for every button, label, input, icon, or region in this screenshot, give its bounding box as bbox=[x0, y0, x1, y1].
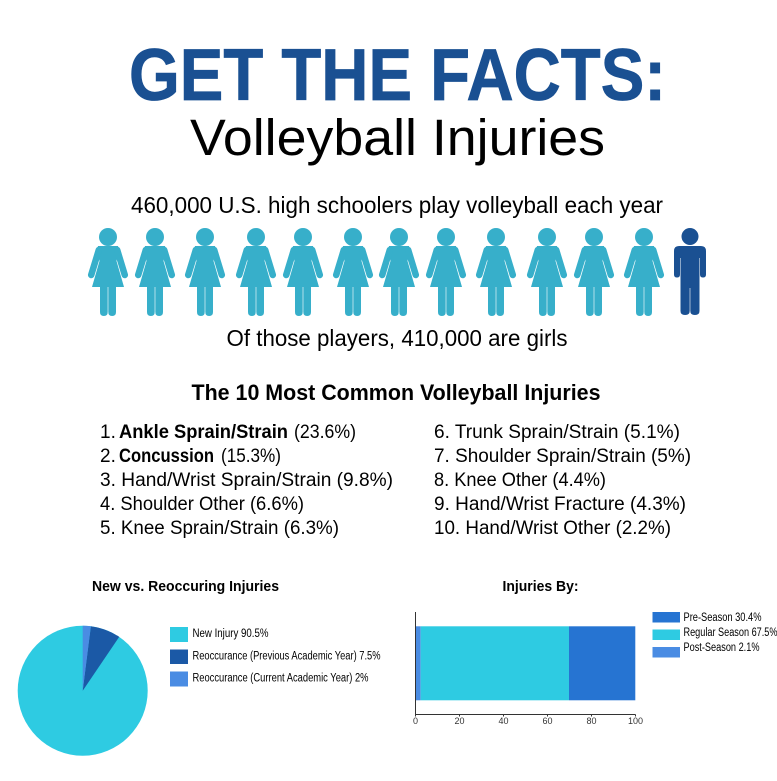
list: injuries 6 to 10: 9. Hand/Wrist Fracture (4.3%) bbox=[434, 494, 686, 515]
legend: pie chart: Reoccurance (Previous Academic Year) 7.5% bbox=[192, 650, 380, 662]
heading: pie chart: New vs. Reoccuring Injuries bbox=[92, 578, 279, 595]
icons: girls bbox=[91, 228, 661, 316]
legend: bar chart bbox=[652, 612, 777, 658]
legend: pie chart: Reoccurance (Current Academic Year) 2% bbox=[192, 672, 368, 684]
list: injuries 1 to 5: (23.6%) bbox=[294, 422, 356, 443]
list: injuries 1 to 5: 2. bbox=[100, 446, 116, 467]
heading: top 10 injuries: The 10 Most Common Volleyball Injuries bbox=[192, 380, 600, 405]
list: injuries 1 to 5: 1. bbox=[100, 422, 116, 443]
list: injuries 6 to 10: 8. Knee Other (4.4%) bbox=[434, 470, 606, 491]
list: injuries 6 to 10 bbox=[434, 422, 691, 539]
legend: pie chart bbox=[170, 627, 380, 686]
axis labels: 100 bbox=[628, 716, 643, 726]
subtitle: Volleyball Injuries bbox=[190, 109, 605, 166]
list: injuries 1 to 5: Concussion bbox=[119, 446, 214, 467]
pictogram: players bbox=[91, 228, 706, 316]
list: injuries 6 to 10: 10. Hand/Wrist Other (2.2%) bbox=[434, 518, 671, 539]
list: injuries 1 to 5 bbox=[100, 422, 393, 539]
heading: bar chart: Injuries By: bbox=[502, 578, 578, 595]
title: GET THE FACTS: bbox=[129, 35, 666, 116]
legend: bar chart: Post-Season 2.1% bbox=[684, 642, 760, 654]
list: injuries 1 to 5: 3. Hand/Wrist Sprain/Strain (9.8%) bbox=[100, 470, 393, 491]
list: injuries 1 to 5: Ankle Sprain/Strain bbox=[119, 422, 288, 443]
axis labels: 0 bbox=[413, 716, 418, 726]
icon: boy bbox=[674, 228, 706, 315]
pie chart bbox=[18, 626, 148, 756]
list: injuries 1 to 5: (15.3%) bbox=[221, 446, 281, 467]
stacked bar chart bbox=[413, 612, 643, 726]
axis labels: 60 bbox=[542, 716, 553, 726]
axis labels: 80 bbox=[586, 716, 597, 726]
list: injuries 6 to 10: 6. Trunk Sprain/Strain (5.1%) bbox=[434, 422, 680, 443]
list: injuries 6 to 10: 7. Shoulder Sprain/Strain (5%) bbox=[434, 446, 691, 467]
legend: pie chart: New Injury 90.5% bbox=[192, 628, 268, 640]
list: injuries 1 to 5: 5. Knee Sprain/Strain (6.3%) bbox=[100, 518, 339, 539]
axis labels: 20 bbox=[454, 716, 465, 726]
statistic: high schoolers: 460,000 U.S. high schoolers play volleyball each year bbox=[131, 192, 663, 218]
list: injuries 1 to 5: 4. Shoulder Other (6.6%) bbox=[100, 494, 304, 515]
axis labels: 40 bbox=[498, 716, 509, 726]
statistic: girls: Of those players, 410,000 are girls bbox=[226, 325, 568, 351]
axis labels bbox=[413, 716, 643, 726]
